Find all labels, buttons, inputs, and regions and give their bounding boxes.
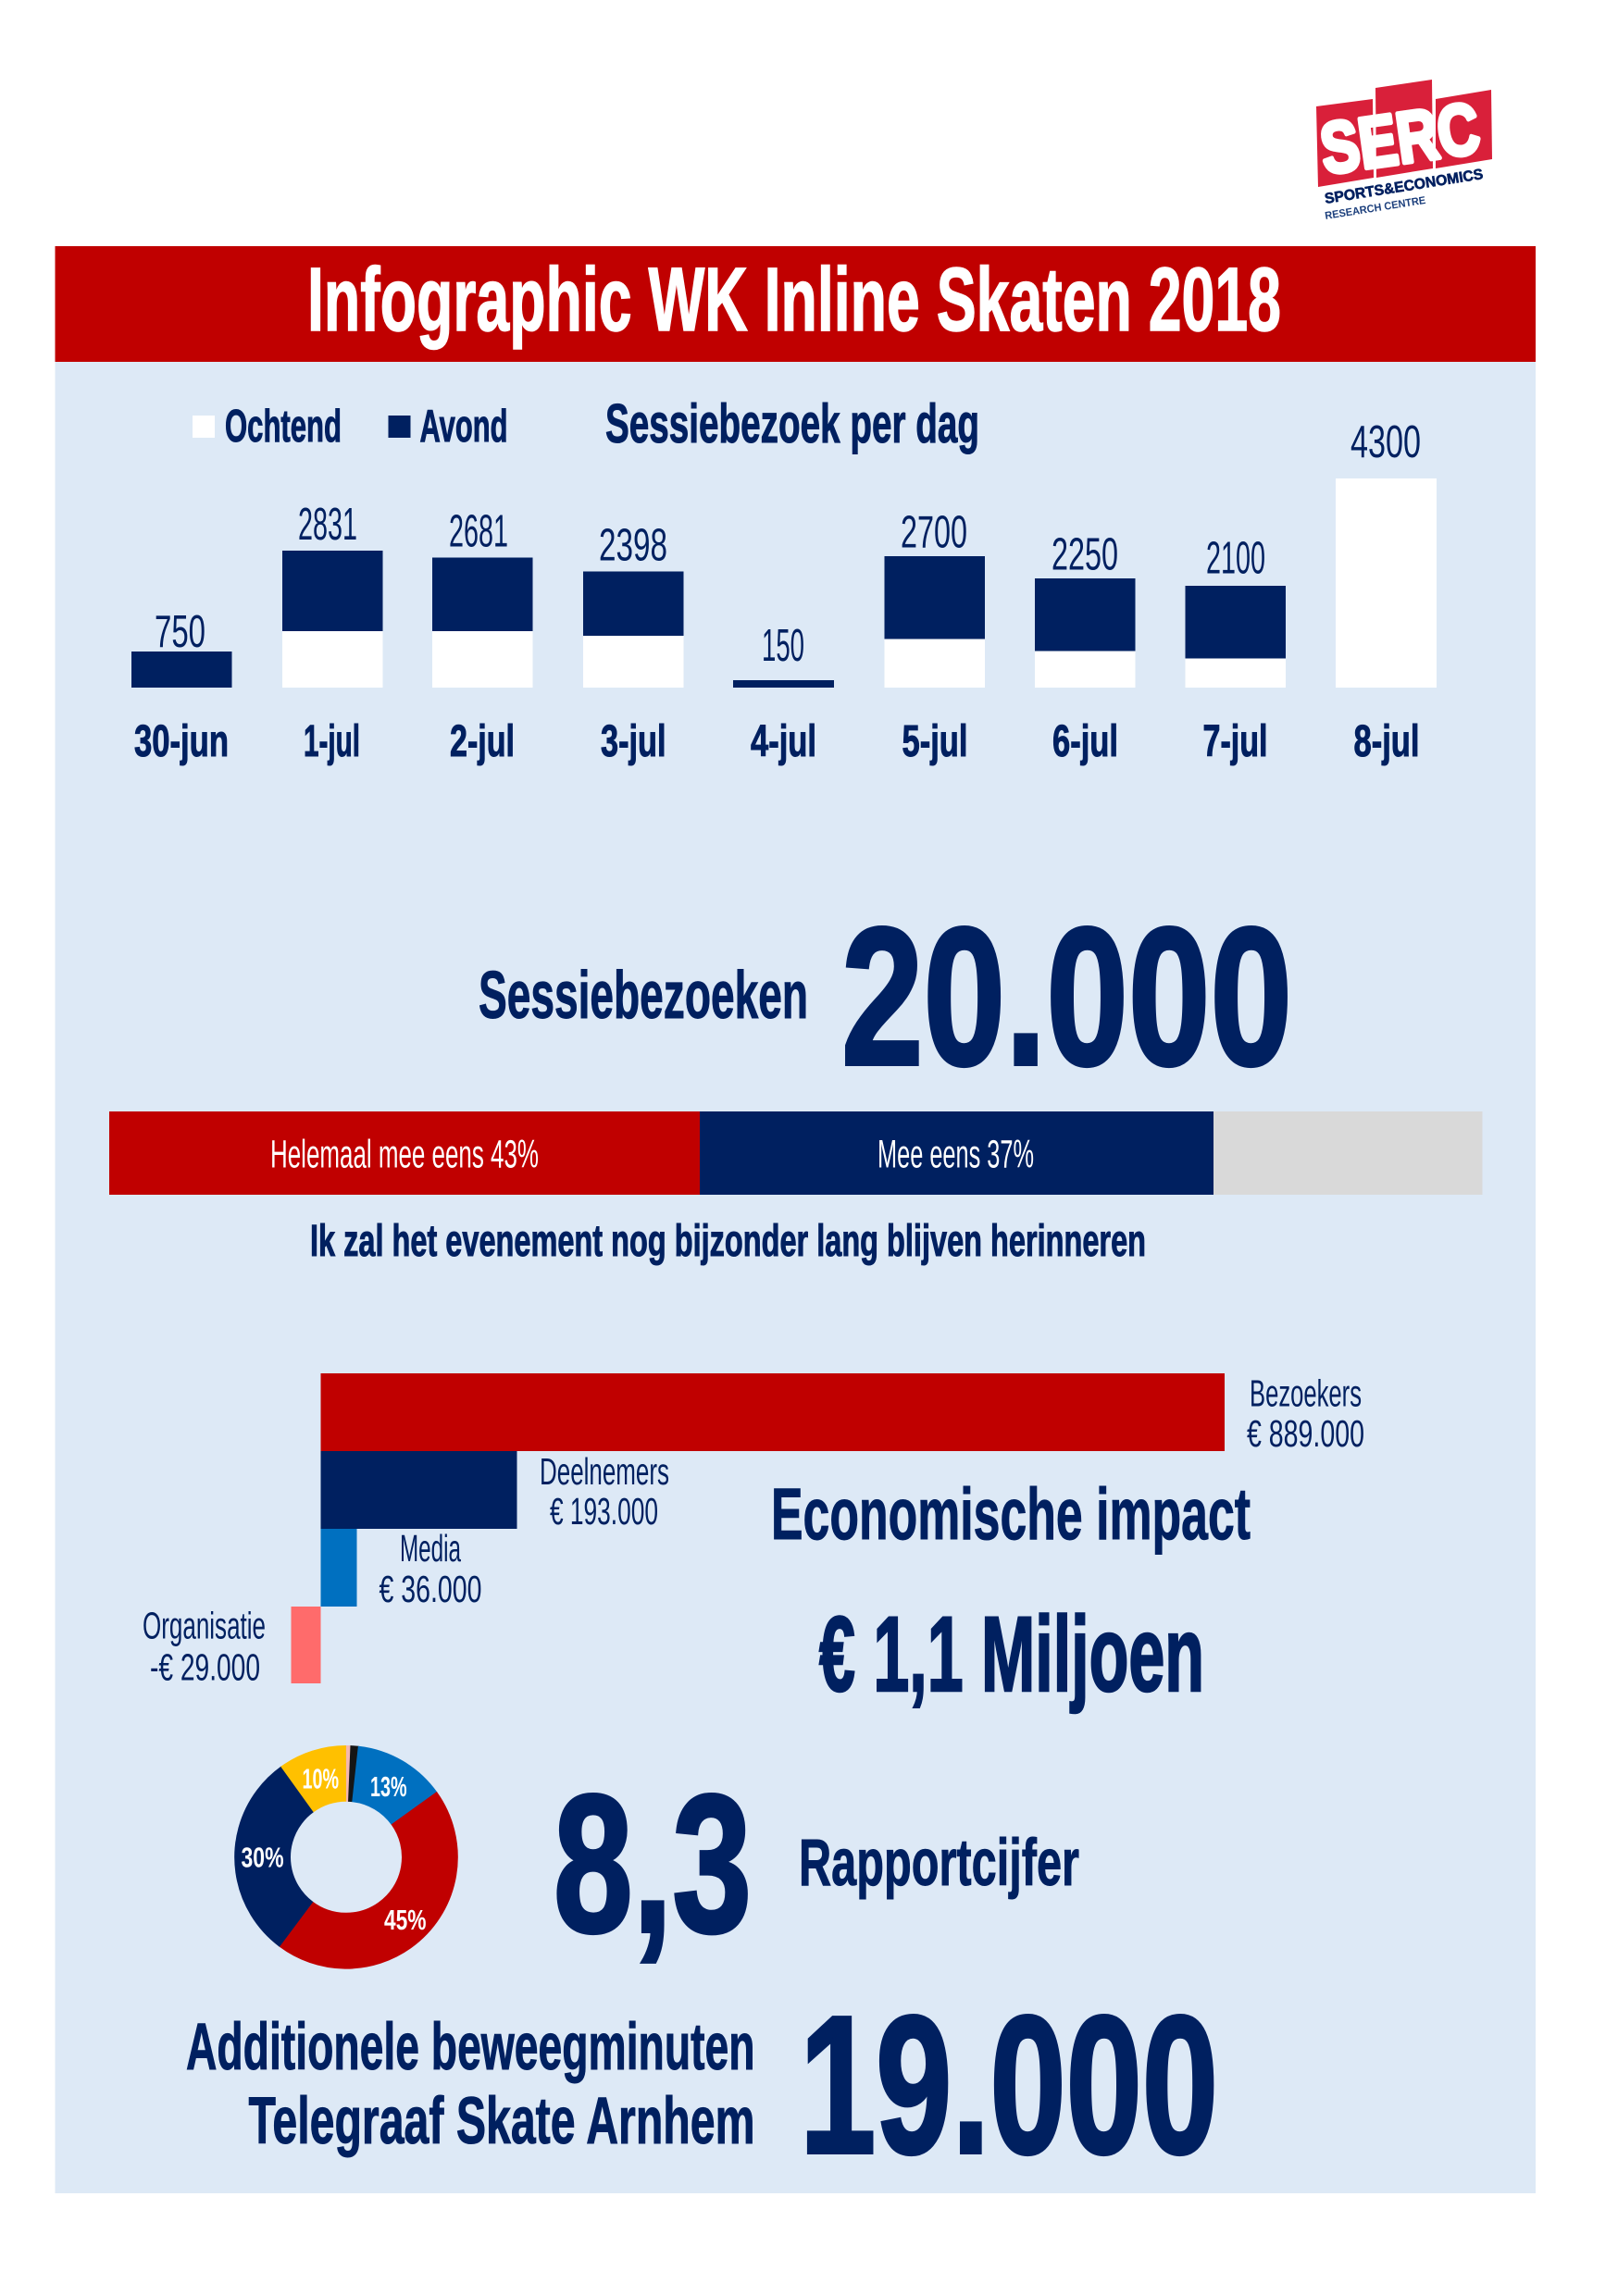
- bar chart: sessions per day: [131, 417, 1437, 766]
- waterfall chart: economic impact: Media: [400, 1527, 461, 1570]
- heading: Sessiebezoek per dag: Sessiebezoek per dag: [605, 393, 979, 454]
- logo: SERC: SPORTS&ECONOMICS: [1324, 167, 1485, 207]
- legend: Ochtend: [225, 402, 342, 452]
- waterfall chart: economic impact: Organisatie: [143, 1605, 266, 1647]
- legend: Avond: [420, 402, 507, 452]
- bar chart: sessions per day: 4-jul: [751, 717, 816, 766]
- waterfall chart: economic impact: Deelnemers: [540, 1450, 669, 1493]
- donut chart: [229, 1740, 464, 1974]
- bar chart: sessions per day: 4300: [1350, 417, 1421, 467]
- stat: 8,3 Rapportcijfer: 8,3: [554, 1754, 752, 1973]
- bar chart: sessions per day: 2100: [1206, 533, 1265, 583]
- bar chart: sessions per day: 30-jun: [134, 717, 229, 766]
- caption: stacked bar: Ik zal het evenement nog bijzonder lang blijven herinneren: [310, 1217, 1146, 1266]
- heading: Economische impact: Economische impact: [771, 1472, 1251, 1555]
- stat: Sessiebezoeken 20.000: Sessiebezoeken: [479, 959, 808, 1033]
- stat: Additionele beweegminuten 19.000: Telegraaf Skate Arnhem: [248, 2085, 755, 2158]
- stat: Additionele beweegminuten 19.000: Additionele beweegminuten: [186, 2011, 755, 2084]
- stat: Sessiebezoeken 20.000: 20.000: [841, 887, 1292, 1106]
- bar chart: sessions per day: 2700: [901, 507, 967, 557]
- logo: SERC: RESEARCH CENTRE: [1325, 195, 1426, 222]
- donut chart: 10%: [302, 1762, 339, 1795]
- bar chart: sessions per day: 2831: [298, 500, 357, 550]
- bar chart: sessions per day: 5-jul: [902, 717, 968, 766]
- legend: [193, 402, 507, 452]
- bar chart: sessions per day: 150: [762, 621, 804, 671]
- bar chart: sessions per day: 6-jul: [1052, 717, 1118, 766]
- stat: 8,3 Rapportcijfer: [554, 1754, 1079, 1973]
- waterfall chart: economic impact: -€ 29.000: [150, 1645, 260, 1688]
- logo: SERC: [1315, 80, 1492, 222]
- bar chart: sessions per day: 3-jul: [601, 717, 666, 766]
- logo: SERC: SERC: [1315, 87, 1485, 190]
- title banner: [56, 246, 1536, 362]
- stat: Additionele beweegminuten 19.000: 19.000: [800, 1975, 1218, 2194]
- stat: 8,3 Rapportcijfer: Rapportcijfer: [799, 1827, 1079, 1900]
- waterfall chart: economic impact: Bezoekers: [1250, 1371, 1362, 1414]
- waterfall chart: economic impact: [143, 1371, 1364, 1688]
- stat: 1,1 Miljoen: € 1,1 Miljoen: [819, 1595, 1204, 1714]
- donut chart: 13%: [370, 1770, 407, 1803]
- stat: Sessiebezoeken 20.000: [479, 887, 1292, 1106]
- bar chart: sessions per day: 2681: [449, 507, 508, 557]
- waterfall chart: economic impact: € 193.000: [550, 1490, 658, 1533]
- donut chart: 45%: [384, 1904, 426, 1936]
- bar chart: sessions per day: 1-jul: [304, 717, 360, 766]
- stacked bar: herinneren: Mee eens 37%: [877, 1133, 1034, 1177]
- waterfall chart: economic impact: € 889.000: [1247, 1412, 1364, 1455]
- bar chart: sessions per day: 750: [155, 607, 205, 657]
- panel: background: [56, 361, 1536, 2193]
- stacked bar: herinneren: [109, 1111, 1483, 1195]
- donut chart: 30%: [241, 1842, 283, 1873]
- bar chart: sessions per day: 2-jul: [450, 717, 515, 766]
- bar chart: sessions per day: 7-jul: [1203, 717, 1268, 766]
- waterfall chart: economic impact: € 36.000: [380, 1568, 481, 1610]
- bar chart: sessions per day: 8-jul: [1353, 717, 1420, 766]
- bar chart: sessions per day: 2250: [1052, 529, 1118, 579]
- stat: Additionele beweegminuten 19.000: [186, 1975, 1218, 2194]
- bar chart: sessions per day: 2398: [599, 520, 667, 570]
- stacked bar: herinneren: Helemaal mee eens 43%: [270, 1133, 539, 1177]
